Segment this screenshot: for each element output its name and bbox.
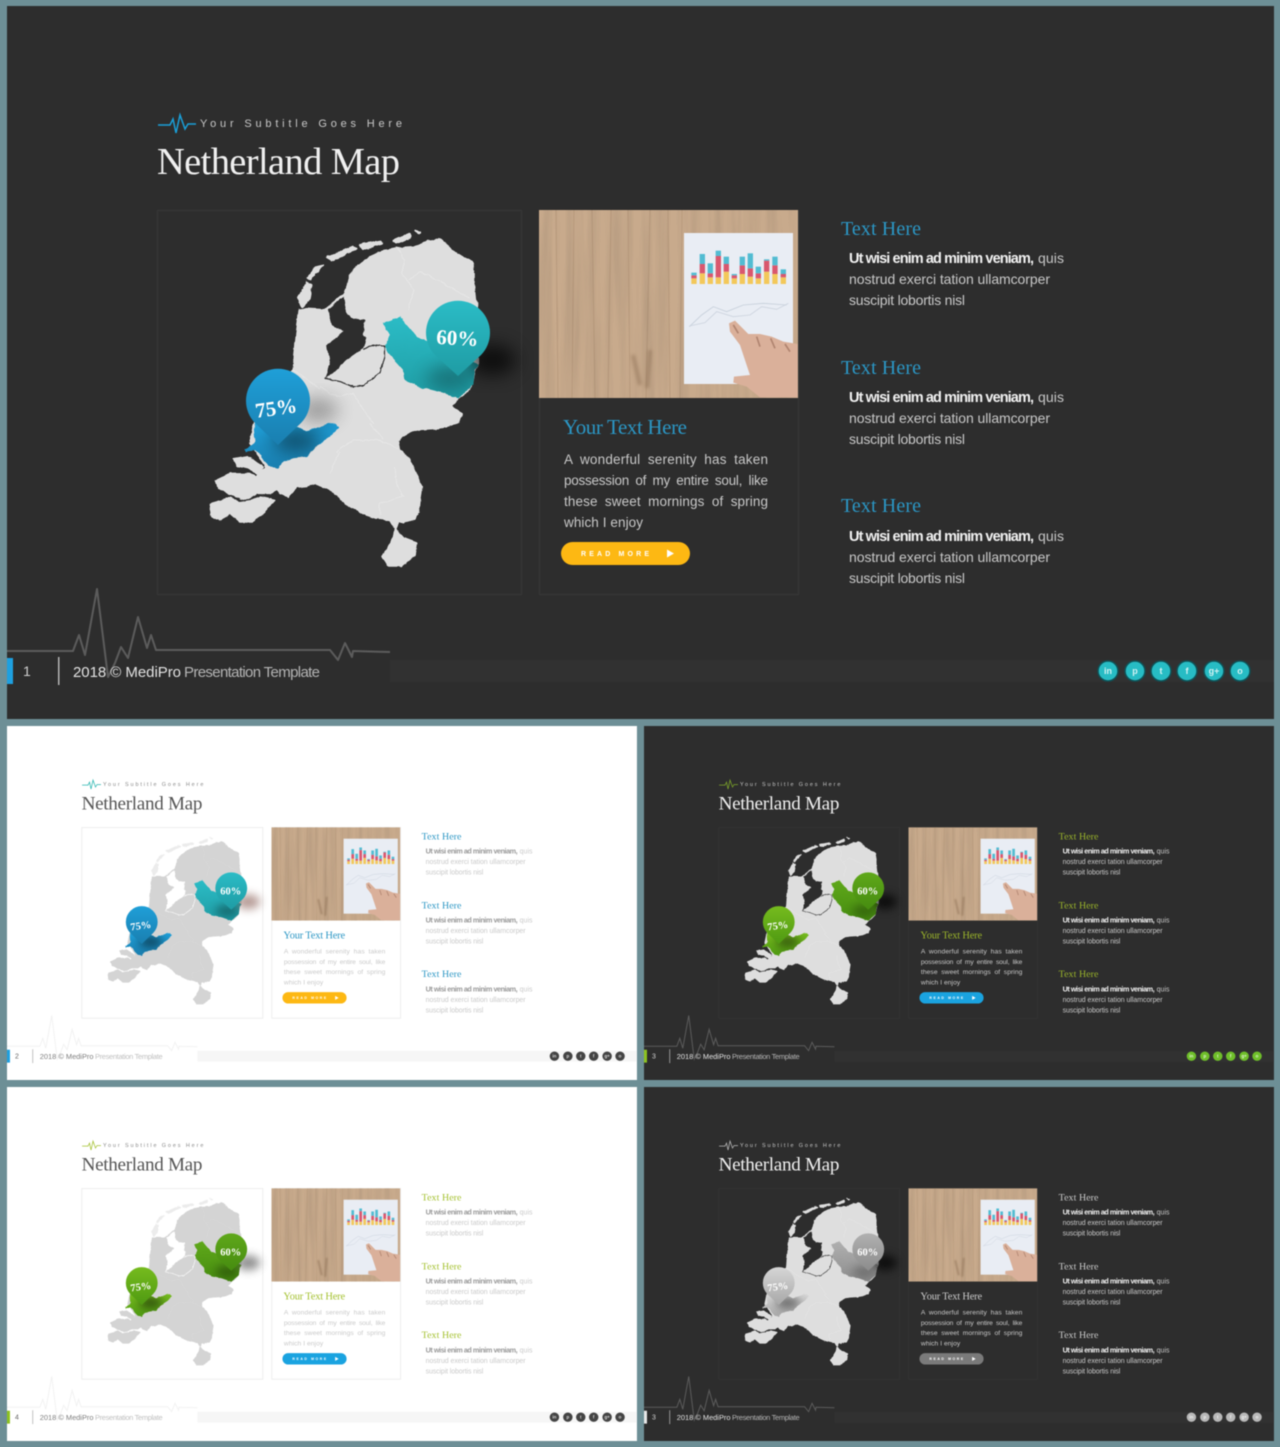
text blocks: suscipit lobortis nisl	[1063, 1007, 1121, 1014]
card text: possession of my entire soul, like	[921, 959, 1023, 966]
social icons: p	[1203, 1054, 1206, 1059]
pin shadow: 60%	[873, 1255, 897, 1270]
card text: possession of my entire soul, like	[564, 473, 768, 488]
footer accent bar	[7, 1050, 10, 1063]
text blocks: suscipit lobortis nisl	[426, 1007, 484, 1014]
title: Netherland Map	[719, 793, 839, 814]
pin: 60%: 60%	[220, 1247, 241, 1258]
pin: 75%	[763, 906, 795, 944]
button: read more	[561, 542, 690, 565]
footer divider	[31, 1410, 34, 1424]
text blocks: quis	[520, 849, 533, 856]
region shading	[776, 905, 876, 947]
highlighted region: east	[383, 317, 478, 398]
footer divider	[31, 1049, 34, 1063]
text block 2: quis	[1038, 389, 1064, 405]
footer text: 2018 © MediPro	[40, 1052, 94, 1061]
text blocks: nostrud exerci tation ullamcorper	[426, 997, 526, 1004]
page number: 3	[652, 1054, 656, 1061]
pin: 75%: 75%	[767, 920, 789, 933]
card heading: Your Text Here	[920, 931, 982, 941]
text blocks: quis	[1157, 849, 1170, 856]
footer text: 2018 © MediPro	[40, 1413, 94, 1422]
slide 5: dark grey theme	[644, 1087, 1274, 1441]
text blocks: suscipit lobortis nisl	[1063, 1299, 1121, 1306]
social icons: t	[580, 1054, 582, 1059]
text block 1: quis	[1038, 250, 1064, 266]
card text: A wonderful serenity has taken	[921, 1309, 1023, 1316]
map of the Netherlands	[745, 1198, 878, 1365]
icon: subtitle pulse	[719, 1141, 738, 1150]
footer divider	[668, 1410, 671, 1424]
panel: photo card	[272, 827, 401, 1018]
text blocks: quis	[520, 987, 533, 994]
text blocks: Text Here	[1059, 1262, 1099, 1273]
text blocks: Text Here	[1059, 1193, 1099, 1204]
card text	[283, 1309, 386, 1348]
text block 1	[841, 218, 1064, 308]
social icons: o	[1256, 1054, 1259, 1059]
pin: 60%	[215, 872, 247, 910]
text block 1: Ut wisi enim ad minim veniam,	[849, 251, 1034, 267]
card text: these sweet mornings of spring	[284, 1330, 386, 1337]
text blocks: nostrud exerci tation ullamcorper	[1063, 859, 1163, 866]
footer accent bar	[7, 1411, 10, 1424]
card text	[920, 1309, 1023, 1348]
social icons: f	[1186, 666, 1190, 676]
text blocks: Ut wisi enim ad minim veniam,	[426, 1346, 518, 1355]
subtitle: Your Subtitle Goes Here	[103, 1143, 203, 1149]
title: Netherland Map	[82, 793, 202, 814]
text block 3: suscipit lobortis nisl	[849, 570, 965, 586]
card heading: Your Text Here	[563, 415, 687, 439]
panel: photo card	[909, 1188, 1038, 1379]
pin: 60%	[852, 1233, 884, 1271]
social icons: g+	[604, 1415, 610, 1420]
text blocks: nostrud exerci tation ullamcorper	[426, 928, 526, 935]
footer text: Presentation Template	[184, 664, 320, 681]
footer text	[677, 1413, 800, 1422]
text blocks: nostrud exerci tation ullamcorper	[426, 1358, 526, 1365]
button: read more: READ MORE	[292, 1357, 327, 1361]
footer text: 2018 © MediPro	[677, 1413, 731, 1422]
social icons: f	[1230, 1415, 1232, 1420]
slide 3: dark green theme	[644, 726, 1274, 1080]
subtitle: Your Subtitle Goes Here	[103, 782, 203, 788]
pin: 75%	[126, 1267, 158, 1305]
button: read more: READ MORE	[292, 996, 327, 1000]
footer divider	[58, 657, 60, 685]
text blocks: quis	[520, 918, 533, 925]
footer accent bar	[644, 1050, 647, 1063]
text block 1: nostrud exerci tation ullamcorper	[849, 271, 1050, 287]
pin shadow: 60%	[236, 1255, 260, 1270]
text blocks	[1059, 832, 1170, 1014]
social icons	[550, 1412, 625, 1422]
panel: map	[82, 1189, 263, 1379]
social icons: in	[552, 1054, 557, 1059]
heartbeat line	[7, 589, 390, 677]
card text: which I enjoy	[283, 1341, 324, 1348]
social icons: g+	[1241, 1054, 1247, 1059]
card text: these sweet mornings of spring	[564, 494, 768, 509]
text blocks: suscipit lobortis nisl	[1063, 1368, 1121, 1375]
text block 2: Text Here	[841, 357, 921, 379]
footer band	[390, 660, 1274, 682]
social icons: in	[552, 1415, 557, 1420]
text block 3: quis	[1038, 528, 1064, 544]
pin shadow: 60%	[468, 345, 516, 375]
text block 2: Ut wisi enim ad minim veniam,	[849, 390, 1034, 406]
footer band	[834, 1412, 1274, 1423]
text blocks: Ut wisi enim ad minim veniam,	[1063, 1346, 1155, 1355]
text blocks	[422, 832, 533, 1014]
card text: possession of my entire soul, like	[284, 1320, 386, 1327]
text blocks: Text Here	[422, 1262, 462, 1273]
panel: photo card	[909, 827, 1038, 1018]
pin shadow: 75%	[298, 398, 338, 422]
pin: 60%: 60%	[220, 886, 241, 897]
card text	[283, 948, 386, 987]
text blocks: quis	[520, 1348, 533, 1355]
social icons: f	[1230, 1054, 1232, 1059]
text blocks: Text Here	[422, 832, 462, 843]
photo: chart on wooden desk	[539, 210, 798, 398]
text blocks: quis	[1157, 1348, 1170, 1355]
text blocks: Ut wisi enim ad minim veniam,	[426, 1277, 518, 1286]
text blocks: suscipit lobortis nisl	[426, 869, 484, 876]
button: read more: READ MORE	[581, 551, 649, 558]
panel: photo card	[539, 210, 798, 594]
highlighted region: east	[194, 880, 241, 921]
social icons: p	[566, 1415, 569, 1420]
map of the Netherlands	[745, 837, 878, 1004]
social icons: t	[580, 1415, 582, 1420]
highlighted region: west	[125, 1294, 172, 1317]
pin: 60%: 60%	[857, 886, 878, 897]
text blocks	[1059, 1193, 1170, 1375]
card text: possession of my entire soul, like	[284, 959, 386, 966]
text blocks: Ut wisi enim ad minim veniam,	[1063, 985, 1155, 994]
pin: 75%: 75%	[767, 1281, 789, 1294]
footer band	[834, 1051, 1274, 1062]
text blocks: suscipit lobortis nisl	[426, 938, 484, 945]
footer text: Presentation Template	[732, 1413, 800, 1422]
photo: chart on wooden desk	[272, 1188, 400, 1282]
text blocks: Ut wisi enim ad minim veniam,	[1063, 916, 1155, 925]
button: read more	[919, 992, 984, 1004]
icon: subtitle pulse	[719, 780, 738, 789]
card text: which I enjoy	[920, 980, 961, 987]
text blocks: Ut wisi enim ad minim veniam,	[1063, 1277, 1155, 1286]
footer text: Presentation Template	[95, 1413, 163, 1422]
card text: these sweet mornings of spring	[284, 969, 386, 976]
text blocks: Ut wisi enim ad minim veniam,	[426, 916, 518, 925]
icon: subtitle pulse	[158, 115, 196, 133]
title: Netherland Map	[82, 1154, 202, 1175]
card text: these sweet mornings of spring	[921, 1330, 1023, 1337]
text block 1: suscipit lobortis nisl	[849, 292, 965, 308]
region shading	[776, 1266, 876, 1308]
text block 2: suscipit lobortis nisl	[849, 431, 965, 447]
social icons: o	[1256, 1415, 1259, 1420]
text blocks: Text Here	[422, 1193, 462, 1204]
pin: 60%	[852, 872, 884, 910]
footer text	[677, 1052, 800, 1061]
highlighted region: east	[831, 1241, 878, 1282]
text blocks: Ut wisi enim ad minim veniam,	[426, 847, 518, 856]
panel: photo card	[272, 1188, 401, 1379]
card heading: Your Text Here	[920, 1292, 982, 1302]
panel: map	[209, 229, 518, 568]
card text: these sweet mornings of spring	[921, 969, 1023, 976]
title: Netherland Map	[719, 1154, 839, 1175]
photo: chart on wooden desk	[909, 1188, 1037, 1282]
social icons: p	[566, 1054, 569, 1059]
social icons: o	[619, 1054, 622, 1059]
panel: map	[82, 828, 263, 1018]
pin: 60%: 60%	[436, 325, 479, 351]
social icons: t	[1160, 666, 1162, 676]
pin: 60%	[426, 301, 490, 376]
card heading: Your Text Here	[283, 931, 345, 941]
text blocks: Text Here	[422, 1330, 462, 1341]
page number: 1	[23, 663, 31, 679]
title: Netherland Map	[157, 141, 400, 183]
text blocks: suscipit lobortis nisl	[1063, 938, 1121, 945]
card text: possession of my entire soul, like	[921, 1320, 1023, 1327]
text blocks: nostrud exerci tation ullamcorper	[1063, 997, 1163, 1004]
text block 3: nostrud exerci tation ullamcorper	[849, 549, 1050, 565]
highlighted region: east	[831, 880, 878, 921]
icon: subtitle pulse	[82, 1141, 101, 1150]
social icons: g+	[604, 1054, 610, 1059]
card text: which I enjoy	[563, 515, 643, 530]
icon: subtitle pulse	[82, 780, 101, 789]
text blocks: nostrud exerci tation ullamcorper	[1063, 1289, 1163, 1296]
card text: which I enjoy	[920, 1341, 961, 1348]
text block 3	[841, 495, 1064, 586]
footer text	[40, 1413, 163, 1422]
button: read more: READ MORE	[929, 1357, 964, 1361]
highlighted region: west	[125, 933, 172, 956]
card text: A wonderful serenity has taken	[284, 1309, 386, 1316]
text blocks: suscipit lobortis nisl	[426, 1230, 484, 1237]
social icons: t	[1217, 1415, 1219, 1420]
text blocks: Ut wisi enim ad minim veniam,	[426, 1208, 518, 1217]
text block 3: Ut wisi enim ad minim veniam,	[849, 529, 1034, 545]
footer text	[73, 664, 320, 681]
subtitle: Your Subtitle Goes Here	[740, 1143, 840, 1149]
text blocks: Text Here	[1059, 832, 1099, 843]
text blocks: nostrud exerci tation ullamcorper	[1063, 1358, 1163, 1365]
text blocks: quis	[1157, 1210, 1170, 1217]
text blocks: nostrud exerci tation ullamcorper	[1063, 928, 1163, 935]
highlighted region: east	[194, 1241, 241, 1282]
footer text	[40, 1052, 163, 1061]
text blocks	[422, 1193, 533, 1375]
text blocks: Ut wisi enim ad minim veniam,	[1063, 847, 1155, 856]
button: read more	[282, 1353, 347, 1365]
text blocks: quis	[520, 1279, 533, 1286]
card text	[563, 452, 768, 530]
text blocks: quis	[1157, 987, 1170, 994]
text blocks: nostrud exerci tation ullamcorper	[426, 859, 526, 866]
button: read more: READ MORE	[929, 996, 964, 1000]
highlighted region: west	[762, 1294, 809, 1317]
social icons: o	[619, 1415, 622, 1420]
page number: 4	[15, 1415, 19, 1422]
pin: 60%	[215, 1233, 247, 1271]
text blocks: Ut wisi enim ad minim veniam,	[426, 985, 518, 994]
footer text: Presentation Template	[95, 1052, 163, 1061]
footer text: Presentation Template	[732, 1052, 800, 1061]
footer text: 2018 © MediPro	[73, 664, 181, 681]
footer accent bar	[7, 658, 13, 684]
pin shadow: 60%	[873, 894, 897, 909]
text blocks: quis	[520, 1210, 533, 1217]
text blocks: suscipit lobortis nisl	[1063, 1230, 1121, 1237]
card heading: Your Text Here	[283, 1292, 345, 1302]
social icons	[1187, 1412, 1262, 1422]
text blocks: Ut wisi enim ad minim veniam,	[1063, 1208, 1155, 1217]
text block 1: Text Here	[841, 218, 921, 240]
social icons: in	[1189, 1054, 1194, 1059]
card text: which I enjoy	[283, 980, 324, 987]
text blocks: quis	[1157, 1279, 1170, 1286]
social icons: in	[1189, 1415, 1194, 1420]
footer accent bar	[644, 1411, 647, 1424]
pin: 75%	[126, 906, 158, 944]
text block 3: Text Here	[841, 495, 921, 517]
subtitle: Your Subtitle Goes Here	[200, 118, 402, 130]
social icons: f	[593, 1415, 595, 1420]
heartbeat line	[7, 1376, 197, 1420]
page number: 2	[15, 1054, 19, 1061]
pin shadow: 60%	[236, 894, 260, 909]
button: read more	[919, 1353, 984, 1365]
panel: map	[744, 1197, 898, 1366]
heartbeat line	[644, 1376, 834, 1420]
text blocks: nostrud exerci tation ullamcorper	[426, 1220, 526, 1227]
map of the Netherlands	[108, 1198, 241, 1365]
panel: map	[744, 836, 898, 1006]
social icons: g+	[1209, 666, 1219, 676]
social icons: f	[593, 1054, 595, 1059]
text blocks: suscipit lobortis nisl	[426, 1368, 484, 1375]
text block 2: nostrud exerci tation ullamcorper	[849, 410, 1050, 426]
highlighted region: west	[244, 423, 339, 468]
footer divider	[668, 1049, 671, 1063]
card text: A wonderful serenity has taken	[284, 948, 386, 955]
social icons: o	[1237, 666, 1243, 676]
photo: chart on wooden desk	[909, 827, 1037, 921]
slide 4: white green theme	[7, 1087, 637, 1441]
subtitle: Your Subtitle Goes Here	[740, 782, 840, 788]
pin: 75%: 75%	[130, 920, 152, 933]
social icons: t	[1217, 1054, 1219, 1059]
region shading	[139, 905, 239, 947]
slide 1: main dark slide	[7, 6, 1274, 719]
text blocks: suscipit lobortis nisl	[426, 1299, 484, 1306]
text blocks: nostrud exerci tation ullamcorper	[426, 1289, 526, 1296]
social icons	[1187, 1051, 1262, 1061]
button: read more	[282, 992, 347, 1004]
text blocks: Text Here	[422, 901, 462, 912]
heartbeat line	[644, 1015, 834, 1059]
card text: A wonderful serenity has taken	[564, 452, 768, 467]
pin: 60%: 60%	[857, 1247, 878, 1258]
highlighted region: west	[762, 933, 809, 956]
region shading	[272, 366, 474, 452]
text blocks: Text Here	[1059, 969, 1099, 980]
footer text: 2018 © MediPro	[677, 1052, 731, 1061]
map of the Netherlands	[210, 230, 478, 566]
photo: chart on wooden desk	[272, 827, 400, 921]
social icons: in	[1104, 666, 1112, 676]
social icons: p	[1203, 1415, 1206, 1420]
text blocks: Text Here	[422, 969, 462, 980]
region shading	[139, 1266, 239, 1308]
pin: 75%	[246, 369, 310, 445]
text blocks: Text Here	[1059, 901, 1099, 912]
pin: 75%: 75%	[130, 1281, 152, 1294]
slide 2: white blue theme	[7, 726, 637, 1080]
pin: 75%	[763, 1267, 795, 1305]
social icons: p	[1132, 666, 1138, 676]
text block 2	[841, 357, 1064, 447]
text blocks: Text Here	[1059, 1330, 1099, 1341]
text blocks: suscipit lobortis nisl	[1063, 869, 1121, 876]
social icons	[1098, 661, 1250, 681]
footer band	[197, 1412, 637, 1423]
page number: 3	[652, 1415, 656, 1422]
text blocks: nostrud exerci tation ullamcorper	[1063, 1220, 1163, 1227]
text blocks: quis	[1157, 918, 1170, 925]
pin: 75%: 75%	[254, 393, 298, 423]
heartbeat line	[7, 1015, 197, 1059]
card text	[920, 948, 1023, 987]
map of the Netherlands	[108, 837, 241, 1004]
social icons	[550, 1051, 625, 1061]
card text: A wonderful serenity has taken	[921, 948, 1023, 955]
social icons: g+	[1241, 1415, 1247, 1420]
footer band	[197, 1051, 637, 1062]
